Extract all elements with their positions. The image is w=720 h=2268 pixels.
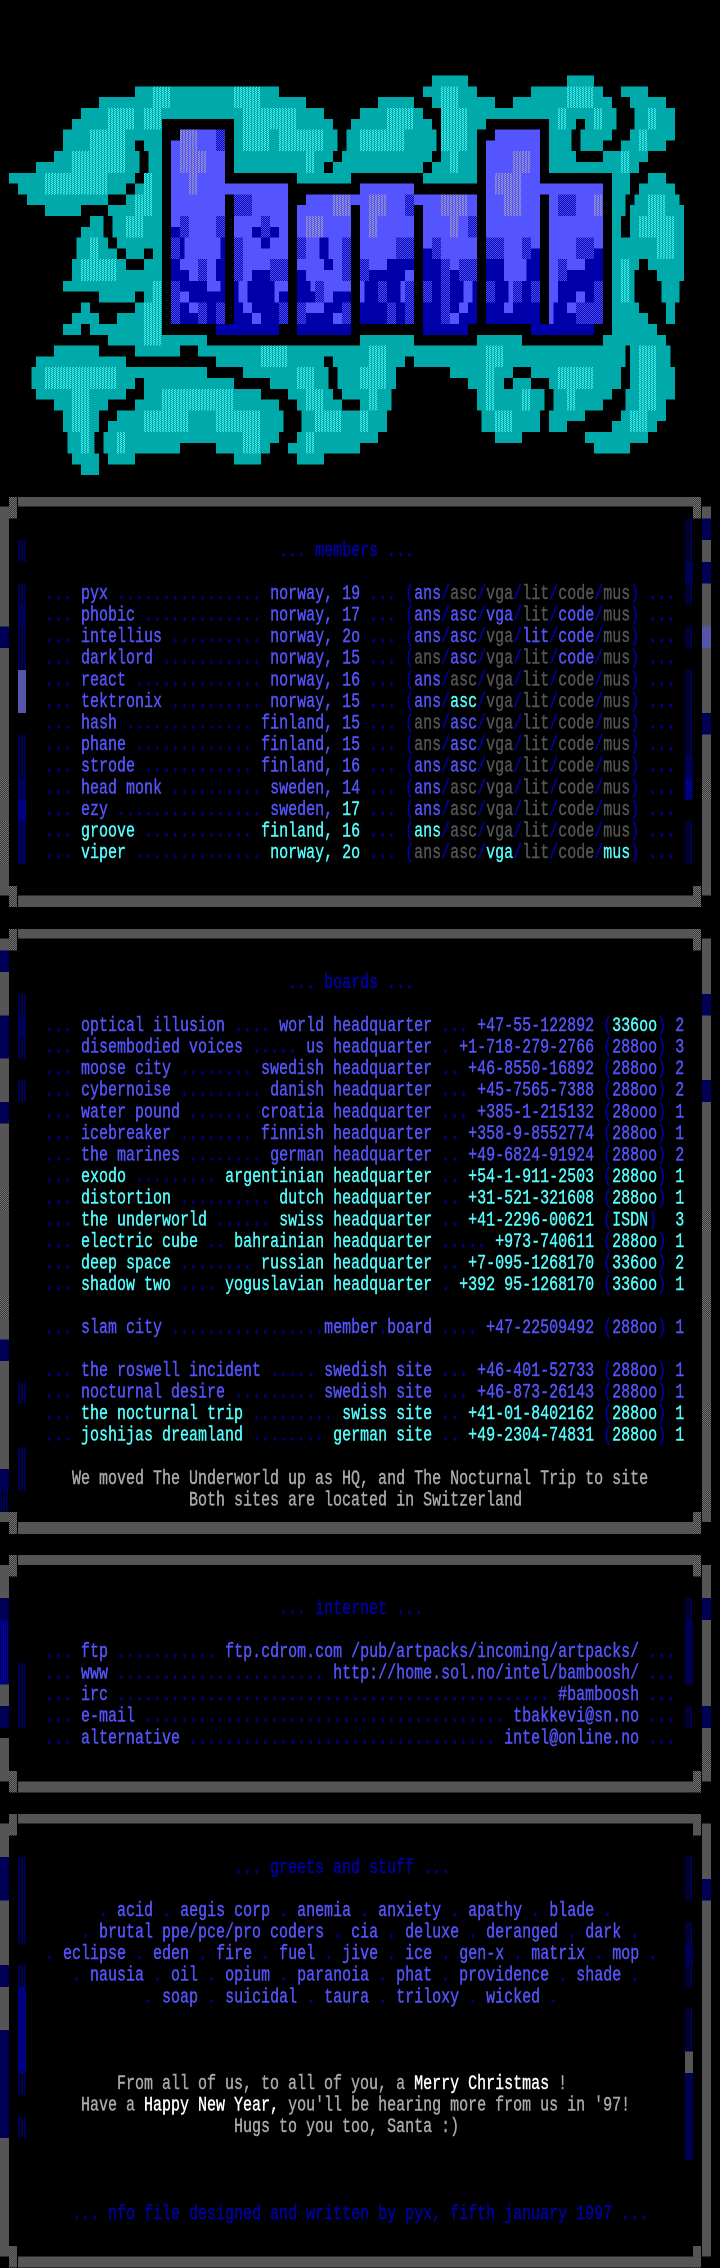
logo: cyan stipple highlights xyxy=(45,86,675,454)
heading: members: ... members ... xyxy=(279,539,414,562)
logo: teal foliage xyxy=(9,81,684,470)
internet frame xyxy=(0,1555,711,1792)
logo: dark blue drips xyxy=(171,232,603,329)
heading: greets and stuff: ... greets and stuff ... xyxy=(234,1857,450,1880)
panel: boards xyxy=(0,929,711,1534)
panel: members xyxy=(0,497,711,907)
note about moved sites: We moved The Underworld up as HQ, and The Nocturnal Trip to site Both sites are located in Switzerland xyxy=(0,1468,648,1513)
logo: blue letters xyxy=(171,130,603,324)
season message: From all of us, to all of you, a Merry Christmas ! Have a Happy New Year, you'll be hearing more from us in '97! Hugs to you too, Santa :) xyxy=(0,2073,630,2139)
logo: grey stipple highlights xyxy=(180,130,603,238)
boards frame xyxy=(0,929,711,1534)
heading: boards: ... boards ... xyxy=(288,971,414,994)
footer credit: ... nfo file designed and written by pyx, fifth january 1997 ... xyxy=(72,2202,648,2225)
logo: teal and blue block art xyxy=(9,76,684,475)
sites list: ... the roswell incident ..... swedish site ... +46-401-52733 (288oo) 1 ... nocturnal desire ......... swedish site ... +46-873-26143 (288oo) 1 ... the nocturnal trip ......... swiss site .. +41-01-8402162 (288oo) 1 ... joshijas dreamland ........ german site .. +49-2304-74831 (288oo) 1 xyxy=(45,1360,684,1448)
members list: ... pyx ................ norway, 19 ... (ans/asc/vga/lit/code/mus) ... ... phobic ............. norway, 17 ... (ans/asc/vga/lit/code/mus) ... ... intellius .......... norway, 2o ... (ans/asc/vga/lit/code/mus) ... ... darklord ........... norway, 15 ... (ans/asc/vga/lit/code/mus) ... ... react .............. norway, 16 ... (ans/asc/vga/lit/code/mus) ... ... tektronix .......... norway, 15 ... (ans/asc/vga/lit/code/mus) ... ... hash .............. finland, 15 ... (ans/asc/vga/lit/code/mus) ... ... phane ............. finland, 15 ... (ans/asc/vga/lit/code/mus) ... ... strode ............ finland, 16 ... (ans/asc/vga/lit/code/mus) ... ... head monk .......... sweden, 14 ... (ans/asc/vga/lit/code/mus) ... ... ezy ................ sweden, 17 ... (ans/asc/vga/lit/code/mus) ... ... groove ............ finland, 16 ... (ans/asc/vga/lit/code/mus) ... ... viper .............. norway, 2o ... (ans/asc/vga/lit/code/mus) ... xyxy=(0,582,675,865)
heading: internet: ... internet ... xyxy=(279,1598,423,1621)
members frame xyxy=(0,497,711,907)
logo: blue stipple shading xyxy=(171,130,603,324)
panel: internet xyxy=(0,1555,711,1792)
member board: ... slam city .................member.board .... +47-22509492 (288oo) 1 xyxy=(45,1317,684,1340)
internet list: ... ftp ........... ftp.cdrom.com /pub/artpacks/incoming/artpacks/ ... ... www ....................... http://home.sol.no/intel/bamboosh/ ... ... irc ................................................ #bamboosh ... ... e-mail ........................................ tbakkevi@sn.no ... ... alternative .................................. intel@online.no ... xyxy=(0,1641,675,1750)
headquarters list: ... optical illusion .... world headquarter ... +47-55-122892 (336oo) 2 ... disembodied voices ..... us headquarter . +1-718-279-2766 (288oo) 3 ... moose city ........ swedish headquarter .. +46-8550-16892 (288oo) 2 ... cybernoise ......... danish headquarter ... +45-7565-7388 (288oo) 2 ... water pound ....... croatia headquarter ... +385-1-215132 (28ooo) 1 ... icebreaker ........ finnish headquarter .. +358-9-8552774 (288oo) 1 ... the marines ........ german headquarter .. +49-6824-91924 (288oo) 2 ... exodo ......... argentinian headquarter .. +54-1-911-2503 (288oo) 1 ... distortion .......... dutch headquarter .. +31-521-321608 (288oo) 1 ... the underworld ...... swiss headquarter .. +41-2296-00621 (ISDN) 3 ... electric cube .. bahrainian headquarter ..... +973-740611 (288oo) 1 ... deep space ........ russian headquarter .. +7-095-1268170 (336oo) 2 ... shadow two .... yoguslavian headquarter . +392 95-1268170 (336oo) 1 xyxy=(45,1014,684,1297)
greets frame xyxy=(0,1814,711,2268)
panel: greets and stuff xyxy=(0,1814,711,2268)
greets list: . acid . aegis corp . anemia . anxiety . apathy . blade . . brutal ppe/pce/pro coders . cia . deluxe . deranged . dark . . eclipse . eden . fire . fuel . jive . ice . gen-x . matrix . mop . . nausia . oil . opium . paranoia . phat . providence . shade . . soap . suicidal . taura . triloxy . wicked . xyxy=(0,1900,657,2009)
